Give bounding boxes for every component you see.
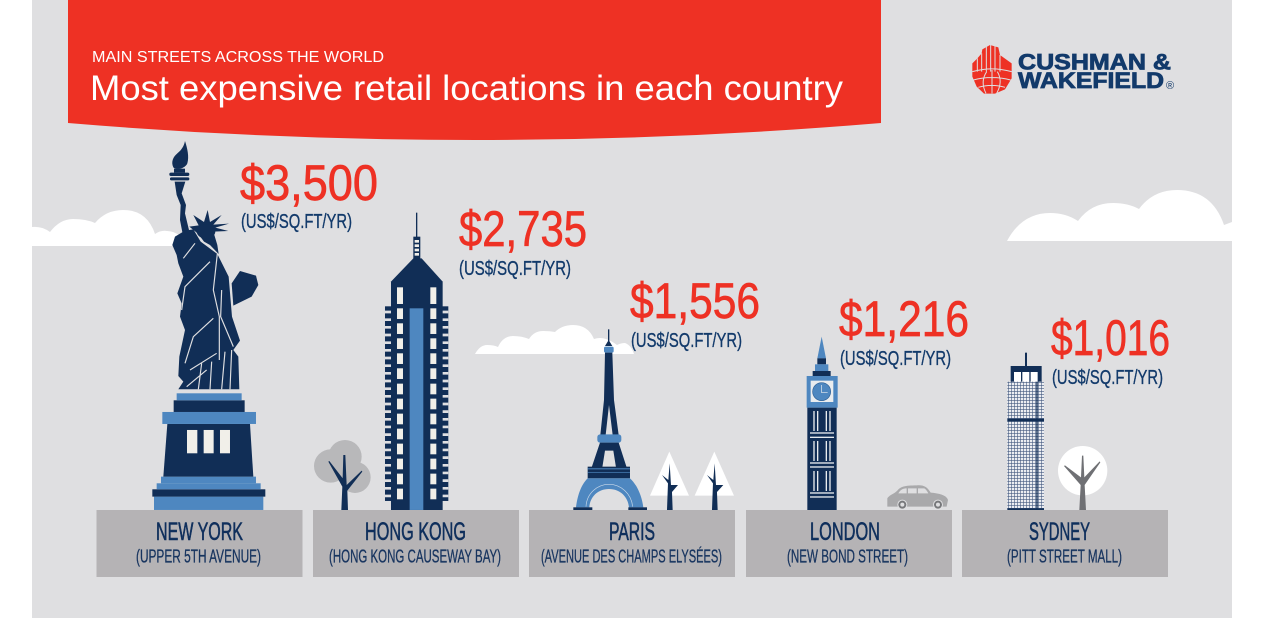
logo: Cushman & Wakefield: WAKEFIELD xyxy=(1018,68,1164,93)
tree white left xyxy=(650,452,689,510)
label: Hong Kong: HONG KONG xyxy=(365,518,466,546)
tree white circle xyxy=(1058,446,1107,510)
price: New York: $3,500 xyxy=(240,155,378,211)
label: New York xyxy=(96,510,302,577)
label: Hong Kong: (HONG KONG CAUSEWAY BAY) xyxy=(329,546,501,566)
price: London: $1,216 xyxy=(839,291,969,347)
cloud: left xyxy=(32,210,180,246)
label: London: (NEW BOND STREET) xyxy=(787,546,908,566)
label: Paris xyxy=(529,510,735,577)
logo icon xyxy=(972,45,1012,94)
landmark: Statue of Liberty xyxy=(152,141,265,510)
grid tower xyxy=(1007,353,1044,510)
label: Paris: PARIS xyxy=(609,518,655,546)
label: London xyxy=(746,510,952,577)
statue figure xyxy=(169,141,258,389)
banner kicker: MAIN STREETS ACROSS THE WORLD xyxy=(92,49,384,66)
logo wordmark: CUSHMAN & xyxy=(1018,50,1171,74)
title banner xyxy=(68,0,881,140)
label: Sydney: (PITT STREET MALL) xyxy=(1007,546,1122,566)
tree white right xyxy=(695,452,734,510)
logo: Cushman & Wakefield: ® xyxy=(1166,80,1174,92)
tree grey xyxy=(314,440,371,510)
price: Sydney: $1,016 xyxy=(1051,310,1170,366)
label: Sydney: SYDNEY xyxy=(1029,518,1090,546)
price: Hong Kong xyxy=(459,201,587,280)
price: New York xyxy=(240,155,378,233)
landmark: Eiffel Tower and trees xyxy=(573,329,734,511)
label: Hong Kong xyxy=(313,510,519,577)
price: London: (US$/SQ.FT/YR) xyxy=(840,348,951,370)
statue folds xyxy=(182,243,233,389)
price: Paris xyxy=(630,273,760,352)
landmark: Big Ben and taxi xyxy=(807,337,948,510)
label: New York: NEW YORK xyxy=(156,518,243,546)
price: Sydney: (US$/SQ.FT/YR) xyxy=(1052,367,1163,389)
banner heading: Most expensive retail locations in each country xyxy=(90,69,844,108)
price: Hong Kong: (US$/SQ.FT/YR) xyxy=(459,258,571,280)
label: London: LONDON xyxy=(810,518,880,546)
price: Paris: (US$/SQ.FT/YR) xyxy=(631,330,742,352)
cloud: right xyxy=(1007,190,1232,241)
price: Paris: $1,556 xyxy=(630,273,760,329)
clock tower xyxy=(807,337,838,510)
price: London xyxy=(839,291,969,370)
statue pedestal xyxy=(152,393,265,510)
taxi xyxy=(887,485,948,510)
landmark: Hong Kong tower and tree xyxy=(314,213,448,510)
label: Paris: (AVENUE DES CHAMPS ELYSÉES) xyxy=(541,546,722,566)
eiffel tower xyxy=(573,329,647,511)
price: Hong Kong: $2,735 xyxy=(459,201,587,257)
label: New York: (UPPER 5TH AVENUE) xyxy=(136,546,261,566)
price: New York: (US$/SQ.FT/YR) xyxy=(241,211,352,233)
price: Sydney xyxy=(1051,310,1170,389)
tower xyxy=(385,213,448,510)
label: Sydney xyxy=(962,510,1168,577)
landmark: Sydney tower and tree xyxy=(1007,353,1107,510)
cloud: middle xyxy=(475,325,634,354)
logo: Cushman & Wakefield xyxy=(972,45,1174,94)
